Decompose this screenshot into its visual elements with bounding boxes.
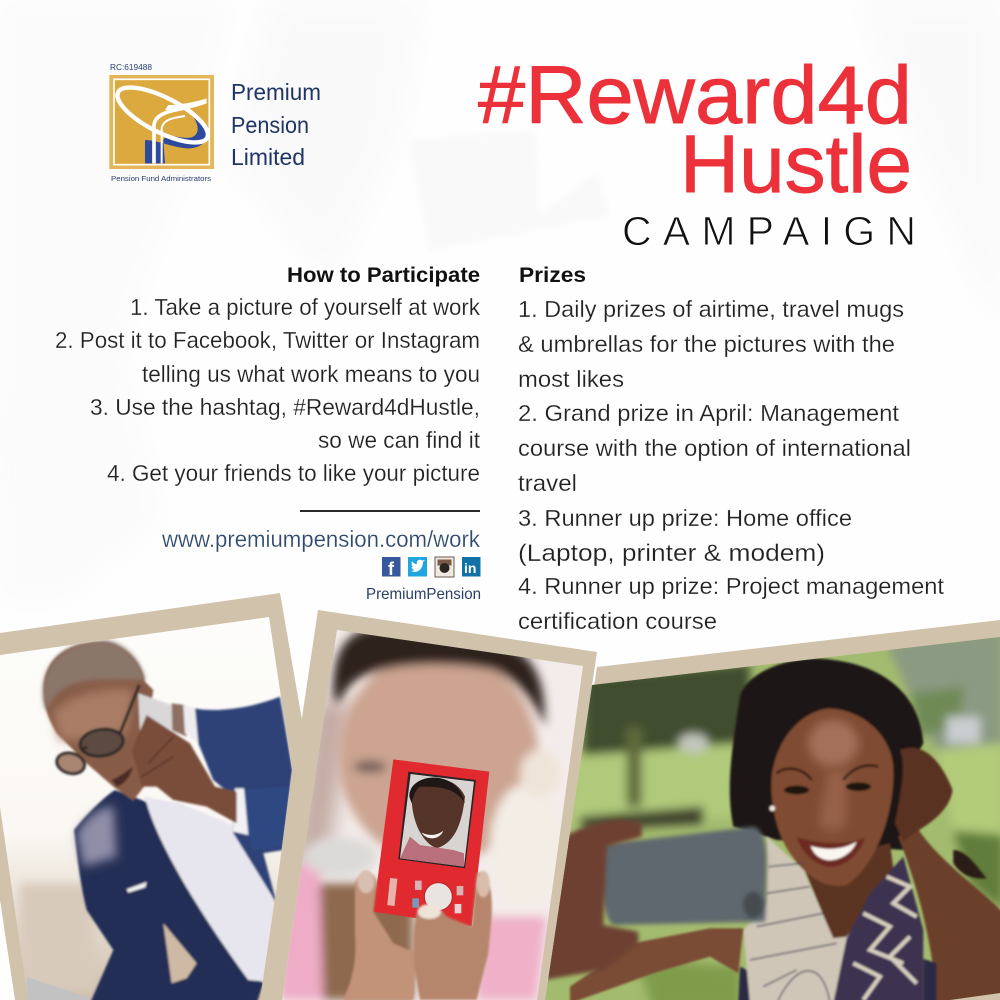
steps list: telling us what work means to you — [142, 361, 480, 387]
man: hand — [132, 715, 237, 823]
blurred face — [338, 650, 538, 863]
prizes list: & umbrellas for the pictures with the — [518, 331, 895, 357]
man: right shoulder — [188, 697, 293, 903]
prizes list: (Laptop, printer & modem) — [518, 540, 825, 567]
man: phone — [138, 693, 172, 733]
man: glasses — [55, 685, 139, 777]
icon: twitter — [408, 557, 427, 576]
prizes list — [518, 296, 945, 634]
website link: www.premiumpension.com/work — [161, 526, 480, 552]
prizes list: 2. Grand prize in April: Management — [518, 400, 900, 426]
title — [478, 50, 916, 254]
title: #Reward4d — [478, 50, 912, 141]
prizes list: travel — [518, 470, 577, 496]
camera body — [373, 759, 489, 927]
camera controls — [387, 878, 397, 906]
prizes list: certification course — [518, 608, 717, 634]
panel: prizes — [518, 264, 945, 634]
woman: smile — [797, 837, 865, 867]
photo: businessman on the phone — [0, 593, 302, 1000]
social icons — [382, 557, 480, 579]
heading: how to participate: How to Participate — [287, 264, 480, 287]
man: shirt — [143, 797, 273, 982]
man: cuff — [233, 788, 248, 835]
photo: woman taking a selfie in a park — [543, 610, 1000, 1000]
title: Hustle — [680, 119, 912, 210]
logo: company name: Limited — [231, 144, 305, 170]
icon: facebook: f — [388, 559, 395, 579]
prizes list: 4. Runner up prize: Project management — [518, 573, 945, 599]
logo: company name: Pension — [231, 112, 309, 138]
prizes list: 1. Daily prizes of airtime, travel mugs — [518, 296, 904, 322]
icon: instagram — [435, 557, 454, 577]
steps list: so we can find it — [318, 427, 481, 453]
prizes list: most likes — [518, 366, 624, 392]
logo: registration number: RC:619488 — [110, 63, 153, 72]
left hand and arm — [570, 928, 743, 1000]
blurred shirt and scarf — [280, 863, 323, 1000]
social handle: PremiumPension — [366, 586, 481, 603]
panel: how to participate — [55, 264, 481, 486]
logo: tagline: Pension Fund Administrators — [111, 174, 211, 183]
steps list: 2. Post it to Facebook, Twitter or Instagram — [55, 327, 480, 353]
photo: woman holding a red camera — [260, 610, 597, 1000]
subtitle: CAMPAIGN — [622, 208, 916, 254]
man: head — [43, 642, 153, 801]
man: laptop edge — [27, 977, 90, 1000]
man figure — [43, 641, 293, 1000]
prizes list: 3. Runner up prize: Home office — [518, 505, 852, 531]
hands — [343, 870, 492, 1000]
man: suit — [74, 790, 263, 1000]
woman: striped top — [736, 966, 751, 1000]
woman: hair — [730, 659, 923, 850]
phone held out — [598, 827, 767, 925]
steps list: 3. Use the hashtag, #Reward4dHustle, — [90, 394, 480, 420]
heading: prizes: Prizes — [519, 264, 586, 287]
icon: linkedin: in — [464, 560, 476, 576]
woman: scarf — [743, 837, 923, 1000]
woman: right arm and hand — [898, 827, 1000, 1000]
logo: company name: Premium — [231, 79, 321, 105]
logo: company name — [231, 79, 321, 170]
woman: neck — [803, 843, 903, 943]
steps list: 1. Take a picture of yourself at work — [130, 294, 480, 320]
steps list — [55, 294, 481, 486]
logo: gold emblem — [109, 75, 215, 169]
woman: face — [771, 708, 893, 886]
logo: Premium Pension Limited — [109, 63, 321, 183]
camera screen photo — [400, 774, 474, 867]
steps list: 4. Get your friends to like your picture — [107, 460, 480, 486]
prizes list: course with the option of international — [518, 435, 911, 461]
woman figure — [730, 659, 1000, 1000]
